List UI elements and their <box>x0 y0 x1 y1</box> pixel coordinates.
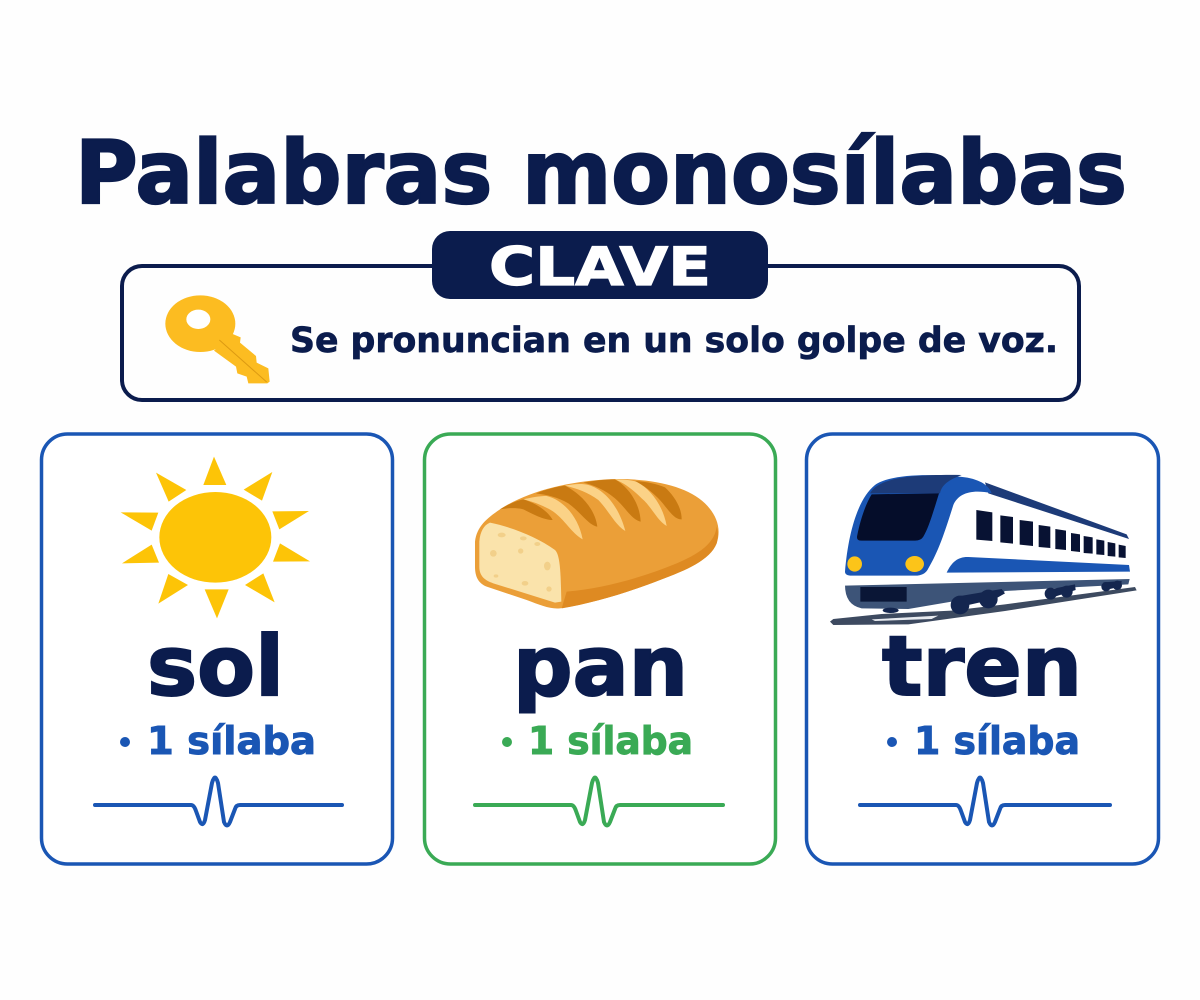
icon: train <box>830 475 1137 625</box>
badge: clave <box>432 231 768 299</box>
key box outline <box>122 266 1079 400</box>
title: Palabras monosílabas <box>75 122 1127 224</box>
panel: clave <box>122 231 1079 400</box>
word: tren: tren <box>882 618 1082 715</box>
pulse line <box>95 778 342 826</box>
card outline <box>424 434 776 864</box>
pulse line <box>475 778 723 826</box>
word: pan: pan <box>513 618 688 715</box>
syllable count: 1 sílaba <box>147 719 316 763</box>
icon: sun <box>121 457 310 618</box>
pulse line <box>860 778 1110 826</box>
panel: pan <box>424 434 776 864</box>
card outline <box>42 434 392 864</box>
panel: sol <box>42 434 392 864</box>
syllable count: 1 sílaba <box>528 719 693 763</box>
card outline <box>806 434 1158 864</box>
badge: clave: CLAVE <box>489 237 711 298</box>
syllable count: 1 sílaba <box>914 719 1080 763</box>
icon: key <box>165 295 270 383</box>
word: sol: sol <box>147 618 284 715</box>
key sentence: Se pronuncian en un solo golpe de voz. <box>290 321 1058 361</box>
panel: tren <box>806 434 1158 864</box>
icon: bread <box>475 479 719 608</box>
